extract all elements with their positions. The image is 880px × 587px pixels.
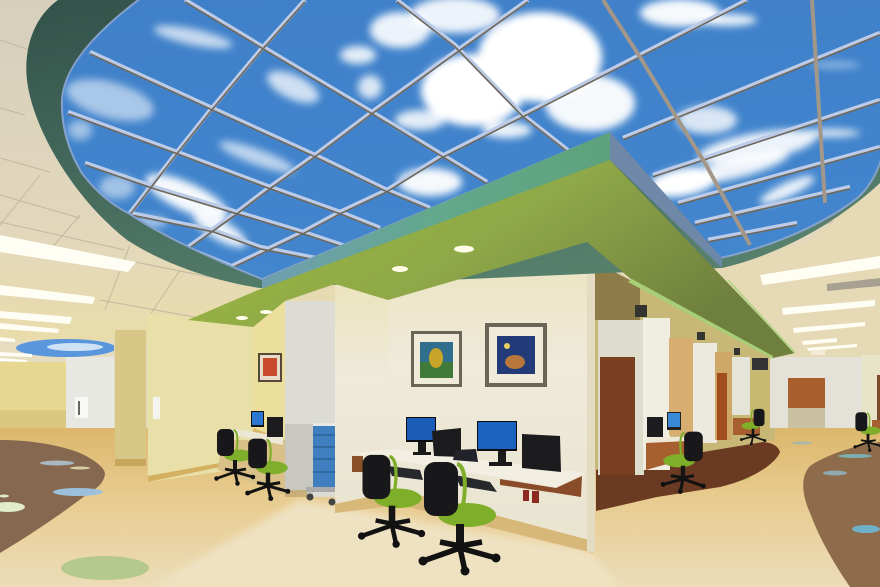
framed art left (411, 331, 462, 387)
back wall left (0, 362, 66, 434)
desk top centre (352, 449, 585, 487)
soffit right edge (728, 280, 795, 353)
monitor left (251, 411, 264, 427)
tan recess far (715, 352, 732, 440)
alcove wall (253, 300, 285, 440)
grid frames dark (68, 2, 880, 269)
desk wood support right (500, 476, 582, 497)
skylight rim (63, 0, 880, 278)
white column (693, 343, 717, 443)
right chair (661, 432, 706, 494)
right corridor background (595, 262, 775, 470)
right workstation wood (646, 441, 688, 470)
recessed lights (236, 246, 474, 320)
floor (0, 428, 880, 587)
wall baseboard left (148, 463, 220, 482)
power outlets (523, 490, 539, 503)
end wall (770, 357, 862, 428)
recess shade (595, 262, 640, 320)
blue oval ceiling left (16, 335, 118, 360)
skylight dark frame (26, 0, 880, 288)
chair two (418, 462, 500, 576)
desk wood support left (352, 456, 363, 472)
wall corner (587, 262, 595, 552)
far right chair and desk (853, 412, 880, 452)
baseboard (335, 490, 593, 553)
tower left (267, 417, 283, 437)
white column far (732, 357, 750, 415)
blue cart (306, 423, 336, 506)
ceiling tile seams (0, 40, 880, 320)
right workstation tower (647, 417, 663, 437)
door (600, 357, 635, 475)
brown floor circle right (803, 442, 880, 587)
brown floor centre (596, 442, 780, 511)
chair left a (214, 429, 255, 486)
alcove floor shade (218, 440, 285, 495)
monitor two (477, 421, 517, 466)
computer towers (432, 428, 561, 472)
far chair (740, 409, 766, 445)
chair one (358, 455, 425, 548)
end door (788, 378, 825, 428)
thermostat (153, 397, 160, 419)
sky ceiling (62, 0, 880, 278)
ceiling background (0, 0, 880, 340)
right vent (827, 278, 880, 291)
grid frames light (68, 0, 880, 267)
column 17 front (598, 320, 644, 475)
floor lighter foreground (150, 500, 620, 587)
monitor one (406, 417, 436, 455)
clouds (62, 0, 860, 254)
pillar left (285, 301, 335, 497)
pillar centre (335, 284, 390, 513)
right lights (760, 256, 880, 351)
tv (752, 358, 768, 370)
far desk (733, 418, 760, 435)
keyboards (388, 466, 497, 492)
yellow wall (147, 313, 253, 482)
far door (717, 373, 727, 440)
right wall (862, 355, 880, 427)
column side (643, 318, 670, 470)
right workstation monitor (667, 412, 681, 430)
phone (453, 449, 478, 462)
room number signs (635, 305, 740, 355)
ceiling lights left (0, 235, 136, 362)
steep frame beams (603, 0, 825, 245)
right fascia (610, 132, 722, 268)
main wall (388, 242, 587, 545)
floor dots right (719, 442, 880, 533)
green soffit (188, 160, 795, 358)
tan recess (669, 338, 693, 435)
small art (258, 353, 282, 382)
chair left b (245, 439, 290, 501)
column tan (115, 330, 146, 466)
right workstation desk (646, 436, 699, 443)
floor dots left (0, 460, 149, 580)
framed art right (485, 323, 547, 387)
exit sign (811, 350, 825, 355)
left fascia (262, 132, 610, 292)
olive wall far (750, 372, 770, 430)
desk left station (230, 428, 283, 445)
soffit stripe (628, 279, 773, 359)
brown floor circle left (0, 440, 105, 553)
white back wall (66, 357, 114, 438)
right ceiling (722, 183, 880, 358)
